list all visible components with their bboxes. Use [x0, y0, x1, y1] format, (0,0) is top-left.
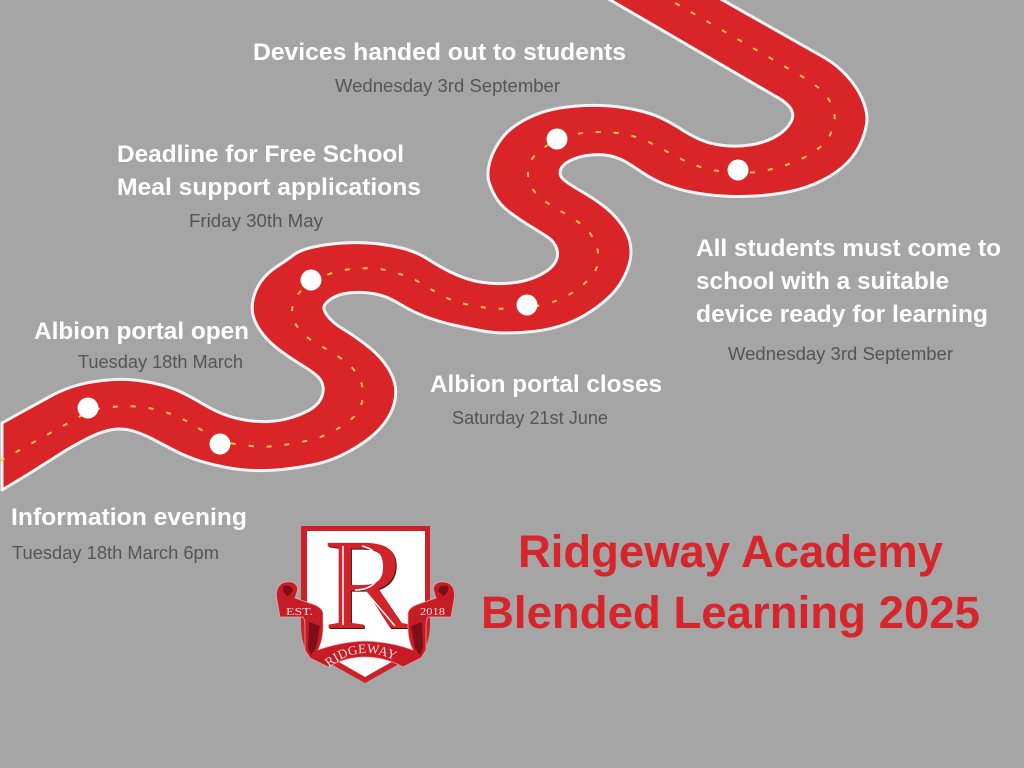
- school crest logo: [276, 513, 455, 683]
- title: Ridgeway Academy: [518, 526, 943, 577]
- title: [481, 526, 980, 638]
- label: students must bring a device: Wednesday 3rd September: [728, 344, 953, 364]
- ribbon text: 2018: [420, 606, 446, 618]
- letter R: R: [324, 513, 411, 657]
- milestone marker: information evening: [78, 398, 98, 418]
- label: Albion portal open: Tuesday 18th March: [78, 352, 243, 372]
- label: devices handed out: Devices handed out to students: [253, 39, 626, 66]
- road centre line: [0, 0, 835, 461]
- label: devices handed out: Wednesday 3rd September: [335, 76, 560, 96]
- label: students must bring a device: school with a suitable: [696, 268, 949, 295]
- milestone marker: students bring device: [728, 160, 748, 180]
- shield: [301, 526, 430, 683]
- label: free school meal deadline: Meal support applications: [117, 174, 421, 201]
- label: free school meal deadline: Friday 30th May: [189, 211, 323, 231]
- label: Albion portal open: Albion portal open: [34, 318, 249, 345]
- label: Albion portal closes: Saturday 21st June: [452, 408, 608, 428]
- label: Albion portal closes: [430, 371, 662, 428]
- ribbon: [276, 582, 455, 667]
- label: information evening: Tuesday 18th March 6pm: [12, 543, 219, 563]
- letter R: R: [325, 514, 412, 658]
- label: free school meal deadline: Deadline for Free School: [117, 141, 404, 168]
- ribbon text: [286, 606, 446, 667]
- title: Blended Learning 2025: [481, 587, 980, 638]
- ribbon text: EST.: [286, 606, 313, 618]
- label: Albion portal closes: Albion portal closes: [430, 371, 662, 398]
- milestone marker: devices handed out: [546, 128, 568, 150]
- label: students must bring a device: [696, 235, 1001, 364]
- label: free school meal deadline: [117, 141, 421, 231]
- label: information evening: [11, 504, 247, 563]
- milestone marker: Albion portal open: [210, 434, 230, 454]
- winding road timeline: [0, 0, 867, 490]
- ribbon folds: [283, 586, 448, 655]
- label: information evening: Information evening: [11, 504, 247, 531]
- label: Albion portal open: [34, 318, 249, 372]
- milestone marker: free school meal deadline: [516, 294, 538, 316]
- label: students must bring a device: All students must come to: [696, 235, 1001, 262]
- ribbon text: RIDGEWAY: [324, 644, 398, 667]
- label: students must bring a device: device ready for learning: [696, 301, 988, 328]
- label: devices handed out: [253, 39, 626, 96]
- milestone marker: Albion portal closes: [300, 270, 322, 290]
- road surface: [2, 0, 867, 490]
